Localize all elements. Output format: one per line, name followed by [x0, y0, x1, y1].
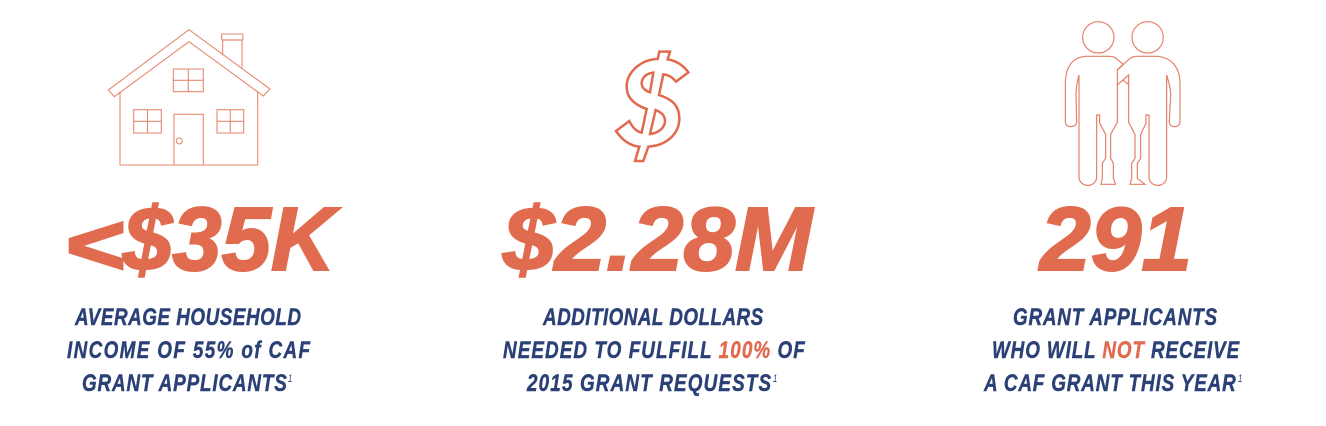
- icon: two people: [1065, 22, 1180, 185]
- panel: unfunded applicants: [983, 22, 1242, 397]
- caption: additional dollars: ADDITIONAL DOLLARS: [542, 303, 764, 331]
- caption: household income: 1: [288, 373, 292, 385]
- caption: unfunded applicants: 1: [1238, 373, 1242, 385]
- caption: household income: [67, 303, 311, 397]
- caption: unfunded applicants: A CAF GRANT THIS YEAR: [983, 369, 1236, 397]
- icon: house: [108, 30, 270, 165]
- big number: <$35K: <: [64, 198, 124, 293]
- big number: 291: 291: [1038, 190, 1192, 290]
- caption: household income: AVERAGE HOUSEHOLD: [74, 303, 301, 331]
- panel: household income: [64, 30, 340, 397]
- caption: unfunded applicants: WHO WILL NOT RECEIVE: [992, 336, 1240, 364]
- caption: additional dollars: 2015 GRANT REQUESTS: [526, 369, 771, 397]
- big number: $2.28M: $2.28M: [502, 189, 814, 290]
- caption: unfunded applicants: [983, 303, 1242, 397]
- caption: additional dollars: 1: [773, 373, 777, 385]
- caption: household income: GRANT APPLICANTS: [82, 369, 287, 397]
- caption: additional dollars: NEEDED TO FULFILL 100% OF: [503, 336, 805, 364]
- caption: household income: INCOME OF 55% of CAF: [67, 336, 311, 364]
- icon: dollar sign: [616, 52, 688, 161]
- panel: additional dollars: [502, 52, 814, 397]
- caption: additional dollars: [503, 303, 805, 397]
- caption: unfunded applicants: GRANT APPLICANTS: [1013, 303, 1217, 331]
- big number: <$35K: $35K: [122, 188, 340, 289]
